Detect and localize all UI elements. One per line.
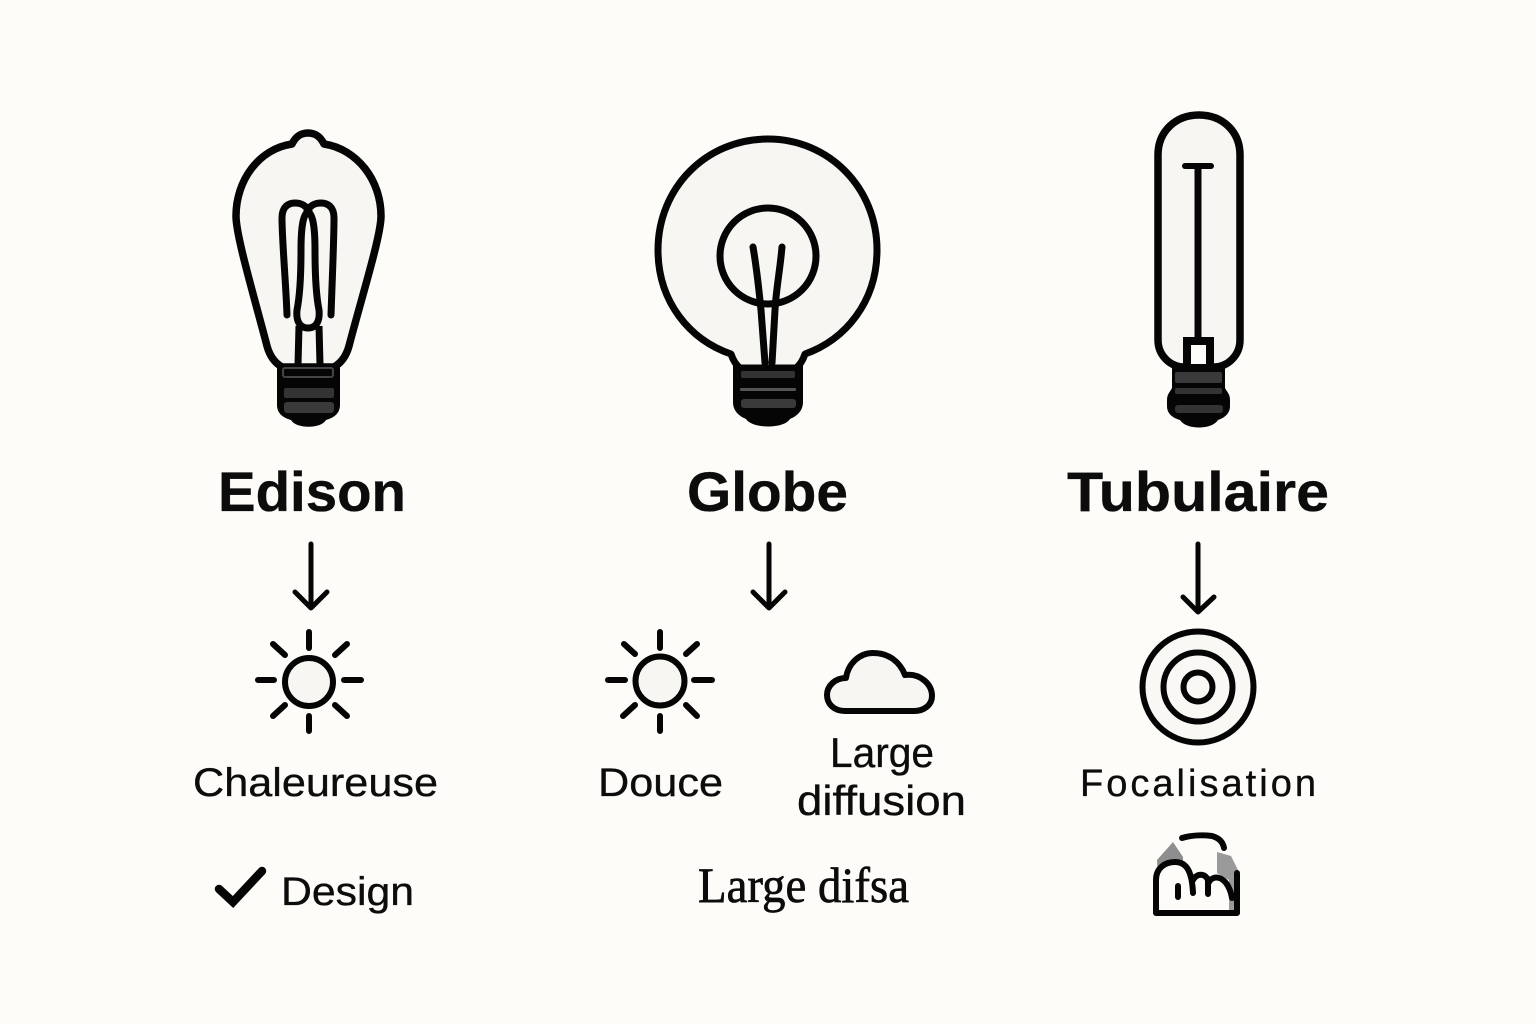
- label: Large diffusion: diffusion: [797, 777, 966, 824]
- arrow: Globe: [753, 544, 785, 608]
- icon: check mark: [219, 871, 262, 902]
- label: Focalisation: Focalisation: [1080, 763, 1316, 805]
- icon: Tubular bulb: [1158, 115, 1240, 428]
- heading: Edison: Edison: [218, 460, 406, 523]
- icon: warm sun: [258, 632, 361, 731]
- icon: soft sun: [608, 632, 712, 731]
- icon: Edison bulb: [236, 133, 381, 427]
- label: Large difsa: Large difsa: [698, 857, 909, 913]
- arrow: Tubulaire: [1183, 544, 1214, 612]
- arrow: Edison: [295, 544, 327, 608]
- icon: concentric target: [1142, 632, 1254, 742]
- icon: Globe bulb base: [733, 366, 803, 426]
- label: Douce: Douce: [598, 761, 723, 805]
- heading: Globe: Globe: [687, 460, 848, 523]
- panel: Globe: [598, 139, 966, 913]
- icon: Globe bulb: [658, 139, 877, 426]
- label: Chaleureuse: Chaleureuse: [193, 761, 438, 805]
- heading: Tubulaire: Tubulaire: [1067, 460, 1329, 523]
- label: Large diffusion: [797, 729, 966, 824]
- icon: abstract focus glyph: [1156, 835, 1238, 915]
- label: Large diffusion: Large: [830, 729, 934, 776]
- label: Design: Design: [281, 870, 414, 914]
- panel: Edison: [193, 133, 438, 914]
- icon: Edison bulb base: [277, 366, 340, 427]
- icon: Tubular bulb base: [1167, 368, 1230, 428]
- icon: cloud: [827, 653, 932, 711]
- panel: Tubulaire: [1067, 115, 1329, 915]
